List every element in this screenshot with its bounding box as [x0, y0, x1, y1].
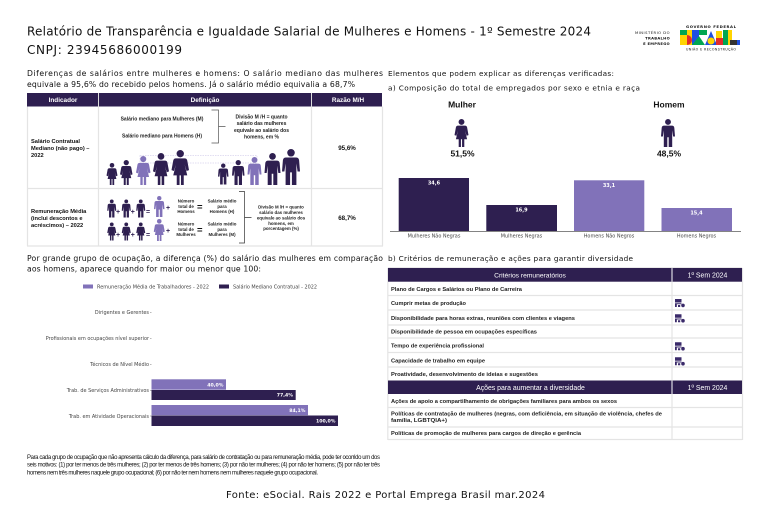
panel: indicator table: Salário Contratual	[31, 139, 80, 145]
definition: average pay: homens, em	[268, 221, 294, 226]
bar chart: workforce composition	[390, 178, 741, 240]
definition: average pay: para	[217, 227, 227, 232]
table: remuneration criteria and diversity actions: Políticas de contratação de mulheres (negras, com deficiência, em situação de violência, chefes de	[391, 412, 662, 418]
definition: average pay: +	[166, 205, 170, 212]
logo: government: UNIÃO E RECONSTRUÇÃO	[686, 46, 736, 52]
panel: indicator table: 2022	[31, 153, 44, 159]
footnote: seis motivos: (1) por ter menos de três mulheres; (2) por ter menos de três homens; (3) por não ter mulheres; (4) por não ter homens; (5) por não ter três	[27, 462, 380, 468]
bar chart: workforce composition: Mulheres Não Negras	[408, 234, 461, 240]
table: remuneration criteria and diversity actions	[388, 268, 742, 440]
text: composition subtitle: a) Composição do total de empregados por sexo e etnia e raça	[388, 84, 640, 92]
stat: men: 48,5%	[657, 148, 681, 158]
bar chart: occupation groups: 84,1%	[289, 408, 306, 414]
bar chart: workforce composition: 16,9	[515, 208, 528, 214]
bar chart: occupation groups: Trab. de Serviços Administrativos	[66, 388, 149, 394]
bar chart: occupation groups: 40,0%	[207, 382, 224, 388]
definition: average pay: equivale ao salário dos	[257, 216, 306, 221]
definition: average pay: +	[116, 232, 120, 239]
definition: average pay: total de	[178, 227, 194, 232]
legend	[83, 284, 317, 290]
bar chart: workforce composition: 33,1	[603, 183, 616, 189]
bar chart: workforce composition: Homens Não Negros	[584, 234, 635, 240]
definition: average pay: =	[197, 225, 203, 236]
text: explanatory elements: Elementos que podem explicar as diferenças verificadas:	[388, 69, 614, 78]
definition: average pay: Homens	[177, 209, 195, 214]
bar chart: occupation groups: Profissionais em ocupações nível superior	[46, 335, 150, 342]
CNPJ: CNPJ: 23945686000199	[27, 43, 182, 57]
bar chart: occupation groups: Técnicos de Nível Médio	[89, 361, 149, 368]
table: remuneration criteria and diversity actions: Proatividade, desenvolvimento de ideias e sugestões	[391, 372, 538, 378]
panel: indicator table: 68,7%	[338, 215, 356, 222]
definition: average pay: Mulheres	[176, 232, 196, 237]
definition: average pay: Salário médio	[208, 198, 237, 204]
bar chart: workforce composition: 34,6	[428, 180, 441, 186]
bar chart: occupation groups: 100,0%	[316, 418, 336, 424]
logo: government: TRABALHO	[645, 36, 670, 40]
stat: men: Homem	[653, 100, 685, 110]
definition: average pay: total de	[178, 204, 194, 209]
footnote: Para cada grupo de ocupação que não apresenta cálculo da diferença, para salário de contratação ou para remuneração média, pode ter ocorrido um dos	[27, 455, 380, 461]
intro text: salary differences	[27, 69, 383, 89]
definition: average pay: +	[131, 232, 135, 239]
bar chart: workforce composition: Mulheres Negras	[501, 234, 543, 240]
footnote	[27, 455, 380, 476]
footnote: homens nem três mulheres naquele grupo ocupacional; (6) por não ter nem homens nem mulheres naquele grupo ocupacional.	[27, 470, 318, 476]
title: Relatório de Transparência e Igualdade Salarial de Mulheres e Homens - 1º Semestre 2024	[27, 24, 591, 38]
panel: indicator table: Remuneração Média	[31, 209, 87, 215]
definition: average pay: Homens (H)	[210, 209, 235, 214]
bar chart: workforce composition: 15,4	[690, 210, 703, 216]
stat: women: 51,5%	[450, 148, 475, 158]
bar chart: occupation groups	[46, 310, 338, 426]
bar chart: workforce composition: Homens Negros	[677, 234, 717, 240]
table: remuneration criteria and diversity actions: Capacidade de trabalho em equipe	[391, 358, 485, 364]
bar chart: occupation groups: Dirigentes e Gerentes	[95, 310, 149, 316]
table: remuneration criteria and diversity actions: Ações para aumentar a diversidade	[476, 385, 585, 392]
logo: government: E EMPREGO	[643, 42, 670, 46]
definition: average pay: Número	[178, 198, 195, 204]
source: Fonte: eSocial. Rais 2022 e Portal Emprega Brasil mar.2024	[226, 490, 545, 501]
definition: median salary: homens, em %	[244, 134, 280, 140]
definition: median salary: equivale ao salário dos	[234, 128, 289, 134]
stat: men	[653, 100, 685, 158]
icon: check marks	[675, 299, 685, 366]
table: remuneration criteria and diversity actions: 1º Sem 2024	[688, 385, 727, 392]
panel: indicator table: Indicador	[49, 97, 78, 104]
definition: average pay: Número	[178, 222, 195, 226]
bar chart: occupation groups: Trab. em Atividade Operacionais	[68, 414, 149, 420]
definition: average pay: +	[166, 228, 170, 235]
logo: government	[635, 24, 740, 52]
legend: Remuneração Média de Trabalhadores - 2022	[97, 284, 209, 290]
definition: average pay	[107, 192, 306, 243]
table: remuneration criteria and diversity actions: Critérios remuneratórios	[494, 272, 567, 280]
definition: median salary: salário das mulheres	[237, 121, 287, 127]
stat: women: Mulher	[448, 100, 477, 110]
definition: average pay: Divisão M /H = quanto	[258, 205, 304, 210]
definition: average pay: porcentagem (%)	[263, 226, 299, 231]
table: remuneration criteria and diversity actions: Cumprir metas de produção	[391, 301, 467, 307]
panel: indicator table: acréscimos) – 2022	[31, 223, 83, 229]
definition: average pay: Mulheres (M)	[208, 232, 236, 237]
table: remuneration criteria and diversity actions: Políticas de promoção de mulheres para cargos de direção e gerência	[391, 431, 582, 437]
panel: indicator table: Mediano (não pago) –	[31, 146, 89, 152]
definition: average pay: para	[217, 204, 227, 209]
definition: average pay: =	[197, 202, 203, 213]
stat: women	[448, 100, 477, 158]
text: occupation group intro	[27, 254, 383, 274]
table: remuneration criteria and diversity actions: 1º Sem 2024	[688, 272, 727, 280]
logo: government: MINISTÉRIO DO	[635, 30, 670, 35]
definition: average pay: =	[146, 232, 150, 239]
definition: median salary: Salário mediano para Homens (H)	[122, 134, 202, 140]
table: remuneration criteria and diversity actions: Tempo de experiência profissional	[391, 344, 484, 350]
intro text: salary differences: Diferenças de salários entre mulheres e homens: O salário mediano das mulheres	[27, 69, 383, 78]
definition: average pay: +	[131, 209, 135, 216]
intro text: salary differences: equivale a 95,6% do recebido pelos homens. Já o salário médio equivalia a 68,7%	[27, 80, 355, 89]
text: occupation group intro: Por grande grupo de ocupação, a diferença (%) do salário das mulheres em comparação	[27, 254, 383, 263]
panel: indicator table	[27, 93, 383, 246]
panel: indicator table: Razão M/H	[332, 97, 365, 104]
logo: government: GOVERNO FEDERAL	[686, 24, 737, 29]
table: remuneration criteria and diversity actions: Disponibilidade para horas extras, reuniões com clientes e viagens	[391, 316, 575, 322]
text: occupation group intro: aos homens, aparece quando for maior ou menor que 100:	[27, 264, 261, 274]
table: remuneration criteria and diversity actions: família, LGBTQIA+)	[391, 418, 447, 424]
table: remuneration criteria and diversity actions: Ações de apoio a compartilhamento de obrigações familiares para ambos os sexos	[391, 399, 617, 405]
panel: indicator table: Definição	[191, 97, 219, 104]
text: criteria subtitle: b) Critérios de remuneração e ações para garantir diversidade	[388, 254, 634, 263]
definition: median salary: Divisão M /H = quanto	[235, 114, 288, 120]
definition: median salary: Salário mediano para Mulheres (M)	[121, 116, 204, 122]
legend: Salário Mediano Contratual - 2022	[233, 284, 317, 290]
definition: median salary	[106, 110, 300, 185]
table: remuneration criteria and diversity actions: Disponibilidade de pessoa em ocupações específicas	[391, 330, 537, 336]
panel: indicator table: 95,6%	[338, 145, 356, 152]
bar chart: occupation groups: 77,4%	[277, 392, 293, 398]
table: remuneration criteria and diversity actions: Plano de Cargos e Salários ou Plano de Carreira	[391, 287, 523, 293]
definition: average pay: Salário médio	[208, 222, 237, 226]
definition: average pay: salário das mulheres	[259, 210, 303, 215]
definition: average pay: +	[116, 209, 120, 216]
definition: average pay: =	[146, 209, 150, 216]
panel: indicator table: (inclui descontos e	[31, 216, 83, 222]
